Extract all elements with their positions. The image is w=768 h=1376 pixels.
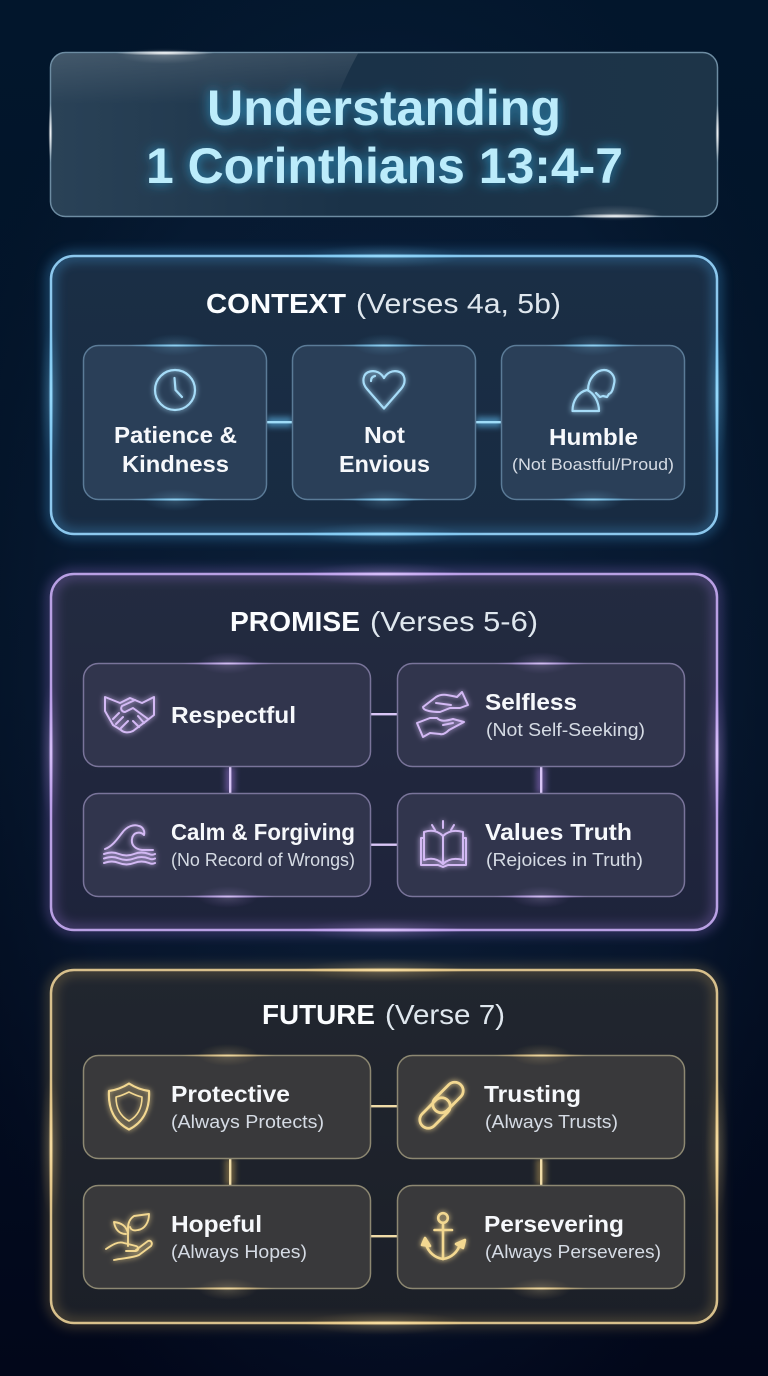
- heading: title text: 1 Corinthians 13:4-7: [146, 138, 623, 194]
- connectors: promise: [225, 713, 546, 846]
- card: persevering: [398, 1186, 684, 1300]
- text: humble: [512, 424, 674, 474]
- icon: shield: [109, 1084, 149, 1130]
- card: not envious: [292, 334, 476, 511]
- text: calm and forgiving: Calm & Forgiving: [171, 819, 355, 845]
- icon: wave: [104, 825, 155, 864]
- panel: promise: [39, 562, 729, 942]
- text: patience and kindness: Patience &: [114, 422, 237, 448]
- text: persevering: [484, 1211, 661, 1262]
- text: patience and kindness: [114, 422, 237, 477]
- text: values truth: Values Truth: [485, 819, 632, 845]
- icon: bowed person: [572, 370, 614, 411]
- icon: open book: [421, 821, 466, 867]
- heading: context: [206, 288, 561, 319]
- heading: title text: Understanding: [207, 80, 561, 136]
- text: humble: Humble: [549, 424, 638, 450]
- heading: promise: (Verses 5-6): [370, 606, 538, 637]
- text: persevering: (Always Perseveres): [485, 1242, 661, 1262]
- text: values truth: [485, 819, 643, 870]
- icon: hand with sprout: [106, 1214, 152, 1260]
- icon: giving hands: [417, 692, 468, 737]
- text: selfless: Selfless: [485, 689, 577, 715]
- text: trusting: [484, 1081, 618, 1132]
- card: values truth: [398, 794, 684, 908]
- text: protective: [171, 1081, 324, 1132]
- text: respectful: Respectful: [171, 702, 296, 728]
- heading: promise: PROMISE: [230, 606, 360, 637]
- connectors: future: [225, 1105, 546, 1237]
- card: calm and forgiving: [84, 794, 370, 908]
- heading: future: (Verse 7): [385, 999, 505, 1030]
- text: not envious: [339, 422, 430, 477]
- text: patience and kindness: Kindness: [122, 451, 229, 477]
- heading: future: [262, 999, 505, 1030]
- text: values truth: (Rejoices in Truth): [486, 850, 643, 870]
- card: trusting: [398, 1044, 684, 1158]
- connector: context 1-2: [267, 417, 292, 427]
- text: selfless: (Not Self-Seeking): [486, 720, 645, 740]
- text: hopeful: Hopeful: [171, 1211, 262, 1237]
- panel: future: [39, 958, 729, 1335]
- text: not envious: Not: [364, 422, 405, 448]
- card: selfless: [398, 652, 684, 766]
- text: calm and forgiving: [171, 819, 355, 870]
- text: selfless: [485, 689, 645, 740]
- icon: clock: [155, 370, 195, 410]
- text: persevering: Persevering: [484, 1211, 624, 1237]
- card: respectful: [84, 652, 370, 766]
- card: humble: [502, 334, 684, 511]
- card: patience and kindness: [84, 334, 266, 511]
- text: hopeful: (Always Hopes): [171, 1242, 307, 1262]
- card: hopeful: [84, 1186, 370, 1300]
- text: hopeful: [171, 1211, 307, 1262]
- heading: promise: [230, 606, 538, 637]
- panel: title: [48, 48, 720, 221]
- text: not envious: Envious: [339, 451, 430, 477]
- heading: future: FUTURE: [262, 999, 375, 1030]
- connector: context 2-3: [476, 417, 501, 427]
- icon: anchor: [422, 1213, 465, 1259]
- text: protective: Protective: [171, 1081, 290, 1107]
- panel: context: [39, 244, 729, 546]
- text: trusting: (Always Trusts): [485, 1112, 618, 1132]
- card: protective: [84, 1044, 370, 1158]
- text: calm and forgiving: (No Record of Wrongs): [171, 850, 355, 870]
- heading: title text: [146, 80, 623, 194]
- heading: context: (Verses 4a, 5b): [356, 288, 561, 319]
- text: trusting: Trusting: [484, 1081, 581, 1107]
- text: humble: (Not Boastful/Proud): [512, 456, 674, 474]
- text: protective: (Always Protects): [171, 1112, 324, 1132]
- icon: handshake: [105, 697, 154, 732]
- icon: heart: [363, 371, 405, 408]
- heading: context: CONTEXT: [206, 288, 346, 319]
- icon: chain link: [416, 1079, 467, 1132]
